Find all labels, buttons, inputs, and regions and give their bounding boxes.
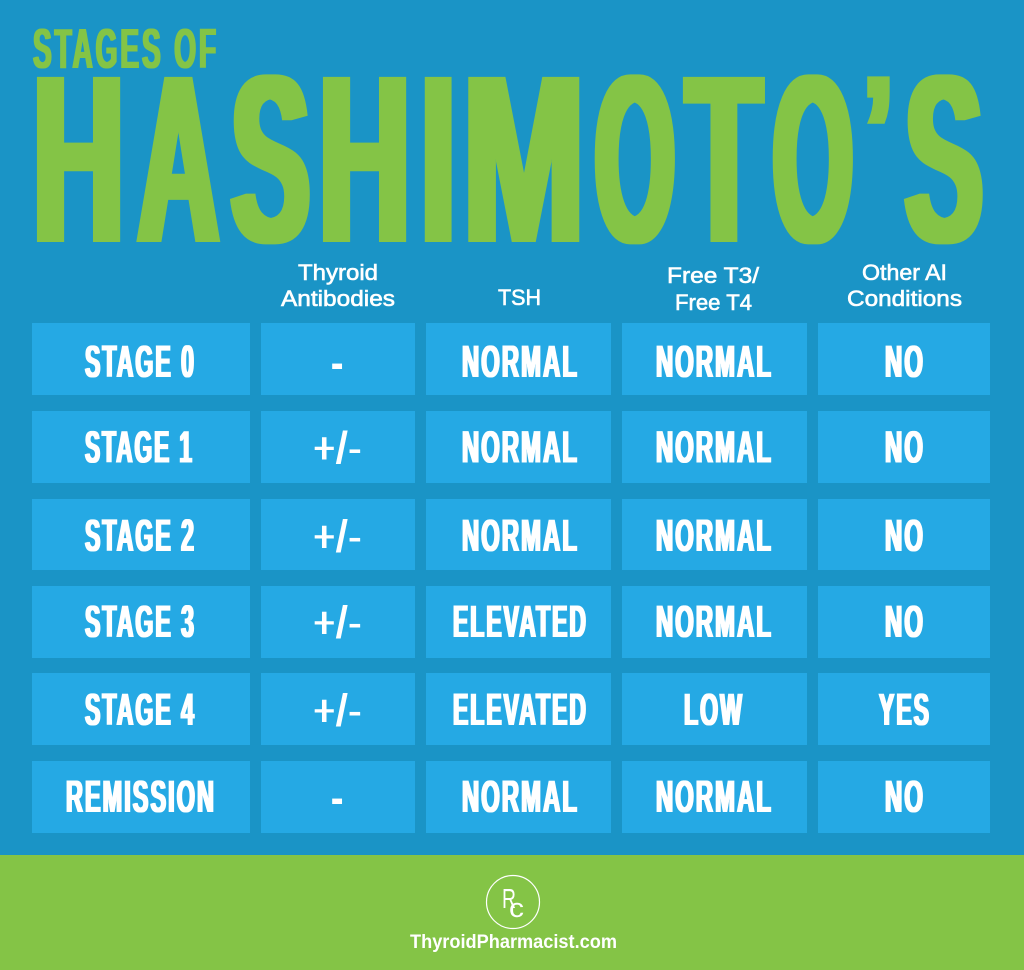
row: Stage 2 [32,499,990,570]
text: STAGES OF [33,17,219,81]
row: Stage 1: NO [885,422,925,472]
footer band [0,855,1024,970]
row: Remission: NORMAL [462,771,579,822]
header: Thyroid Antibodies [281,260,395,311]
row: Stage 0: NORMAL [462,336,579,387]
row: Stage 0 [32,323,990,395]
title: Hashimoto's: O [595,25,675,293]
row: Stage 4: ELEVATED [453,684,588,735]
title: Hashimoto's [33,25,983,293]
row: Stage 2: NORMAL [656,510,773,561]
row: Stage 2: NORMAL [462,510,579,561]
title: Hashimoto's: ’ [865,40,892,228]
row: Remission: NO [885,771,925,822]
title: Hashimoto's: H [33,25,124,293]
row: Stage 1: NORMAL [656,422,773,472]
header: Free T3 / Free T4: Free T4 [675,290,752,315]
header: TSH: TSH [498,285,541,310]
header: Other AI Conditions [847,260,962,311]
row: Stage 0: NORMAL [656,336,773,387]
table: stages [32,323,990,833]
title: Hashimoto's: O [773,25,853,293]
header: Thyroid Antibodies: Antibodies [281,286,395,311]
row: Stage 2: NO [885,510,925,561]
icon: RC logo: R [502,883,516,914]
row: Stage 0: - [332,337,345,388]
footer website: ThyroidPharmacist.com [410,932,617,953]
row: Stage 4: STAGE 4 [85,684,196,735]
header: Other AI Conditions: Conditions [847,286,962,311]
title: Hashimoto's: S [905,25,983,293]
row: Stage 1 [32,411,990,483]
row: Stage 3: ELEVATED [453,596,588,647]
row: Stage 0: NO [885,336,925,387]
header: Thyroid Antibodies: Thyroid [298,260,378,285]
title: Hashimoto's: S [231,25,310,293]
row: Stage 3: NO [885,596,925,647]
row: Remission: - [332,772,345,823]
title: Hashimoto's: A [138,25,218,293]
row: Stage 3: NORMAL [656,596,773,647]
row: Stage 3: STAGE 3 [85,596,196,647]
row: Stage 3 [32,586,990,658]
row: Stage 1: +/- [314,422,363,474]
header: Free T3 / Free T4: Free T3/ [667,263,760,288]
header: Free T3 / Free T4 [667,263,760,315]
row: Remission: NORMAL [656,771,773,822]
row: Stage 4 [32,673,990,745]
row: Stage 0: STAGE 0 [85,336,196,387]
icon: RC logo: c [509,893,524,923]
row: Stage 4: +/- [314,685,363,736]
title: Hashimoto's: I [421,25,455,293]
title: Hashimoto's: H [319,25,410,293]
icon: RC logo [486,876,540,928]
row: Stage 1: STAGE 1 [85,422,194,472]
title: Hashimoto's: M [463,25,585,293]
row: Stage 4: LOW [684,684,744,735]
column headers [281,260,962,315]
row: Stage 1: NORMAL [462,422,579,472]
row: Remission [32,761,990,833]
title: Hashimoto's: T [686,25,762,293]
header: Other AI Conditions: Other AI [862,260,947,285]
row: Stage 3: +/- [314,597,363,648]
row: Remission: REMISSION [66,771,216,822]
row: Stage 4: YES [879,684,931,735]
row: Stage 2: STAGE 2 [85,510,196,561]
row: Stage 2: +/- [314,511,363,562]
